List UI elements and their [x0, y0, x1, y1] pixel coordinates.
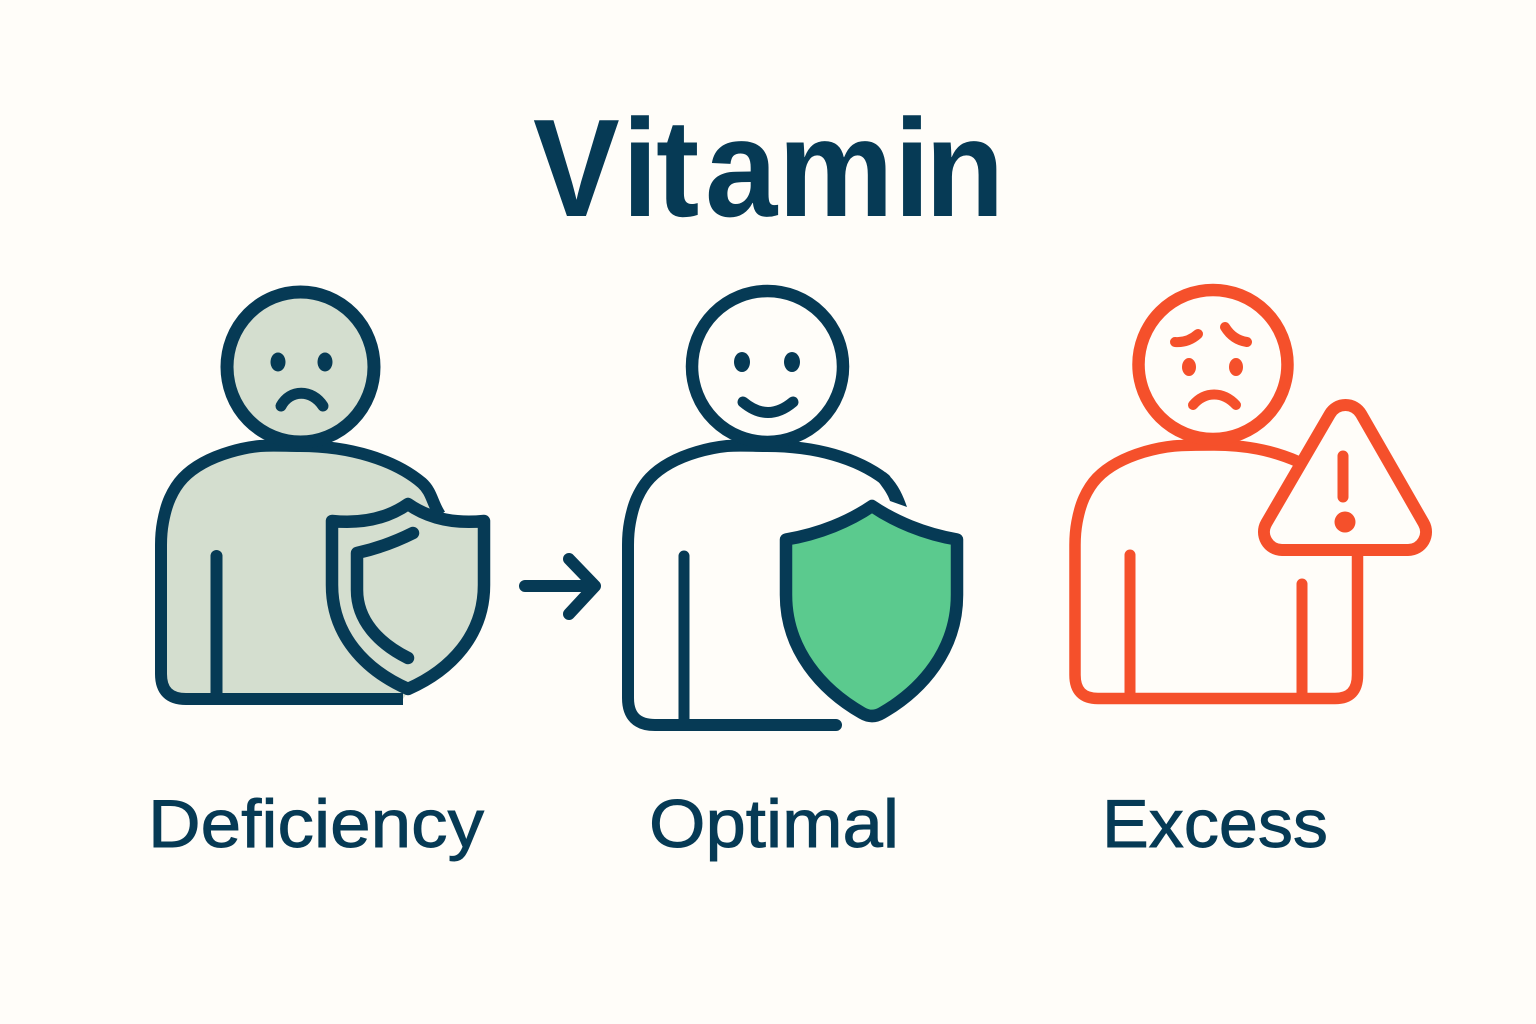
face: deficiency	[270, 352, 332, 406]
figure: optimal person	[628, 291, 957, 725]
body: deficiency	[161, 446, 470, 699]
head: optimal	[692, 291, 843, 442]
figure: excess person	[1075, 290, 1426, 698]
body: optimal	[628, 446, 907, 725]
arrow: deficiency to optimal	[525, 559, 595, 614]
body: excess	[1075, 445, 1358, 698]
head: excess	[1138, 290, 1288, 439]
title: Vitamin	[533, 90, 1004, 246]
figure: deficiency person	[161, 292, 484, 699]
label: deficiency: Deficiency	[148, 786, 484, 862]
shield: optimal	[786, 506, 957, 716]
arm lines: excess	[1130, 555, 1302, 697]
icon: warning triangle	[1264, 405, 1426, 550]
face: optimal	[734, 352, 800, 412]
arm line: deficiency	[210, 556, 222, 696]
face: excess	[1175, 327, 1247, 405]
shield: deficiency	[332, 504, 484, 689]
label: optimal: Optimal	[649, 786, 899, 862]
label: excess: Excess	[1102, 786, 1328, 862]
arm line: optimal	[678, 556, 690, 722]
head: deficiency	[227, 292, 374, 442]
